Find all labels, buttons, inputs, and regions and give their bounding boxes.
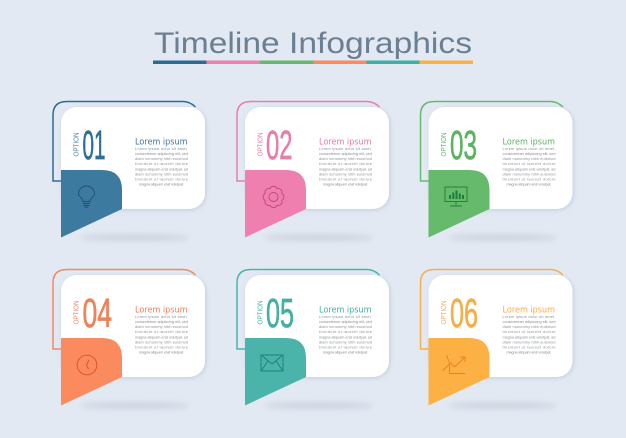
- body text: diam nonummy nibh euismod: [135, 172, 188, 176]
- heading: Lorem ipsum: [502, 138, 555, 148]
- body text: magna aliquam erat volutpat.: [506, 182, 552, 186]
- body text: consectetuer adipiscing elit, sed: [319, 320, 372, 324]
- label: option: OPTION: [74, 132, 80, 156]
- label: option: OPTION: [74, 300, 80, 324]
- body text: consectetuer adipiscing elit, sed: [319, 152, 372, 156]
- number: 05: [266, 290, 294, 336]
- heading: Lorem ipsum: [319, 138, 372, 148]
- body text: magna aliquam erat volutpat, ad: [502, 168, 556, 172]
- body text: tincidunt ut laoreet dolore: [319, 162, 372, 166]
- title: Timeline Infographics: [154, 27, 472, 60]
- body text: [319, 315, 372, 354]
- body text: consectetuer adipiscing elit, sed: [502, 320, 556, 324]
- body text: tincidunt ut laoreet dolore: [135, 346, 188, 350]
- number: 03: [450, 122, 477, 168]
- body text: diam nonummy nibh euismod: [135, 325, 188, 329]
- body text: Lorem ipsum dolor sit amet,: [502, 315, 556, 319]
- body text: Lorem ipsum dolor sit amet,: [135, 147, 188, 151]
- panel: option 04: [53, 270, 205, 409]
- number: 01: [82, 122, 106, 168]
- body text: magna aliquam erat volutpat, ad: [502, 336, 556, 340]
- panel: option 05: [237, 270, 389, 409]
- body text: magna aliquam erat volutpat, ad: [135, 336, 188, 340]
- icon: envelope: [261, 355, 283, 371]
- body text: magna aliquam erat volutpat, ad: [319, 336, 372, 340]
- number: 04: [82, 290, 112, 336]
- body text: tincidunt ut laoreet dolore: [135, 162, 188, 166]
- body text: consectetuer adipiscing elit, sed: [135, 320, 188, 324]
- body text: magna aliquam erat volutpat.: [506, 350, 552, 354]
- heading: Lorem ipsum: [135, 138, 188, 148]
- body text: diam nonummy nibh euismod: [502, 325, 556, 329]
- body text: magna aliquam erat volutpat.: [139, 182, 184, 186]
- body text: diam nonummy nibh euismod: [135, 157, 188, 161]
- body text: [319, 147, 372, 186]
- body text: diam nonummy nibh euismod: [319, 340, 372, 344]
- body text: diam nonummy nibh euismod: [319, 157, 372, 161]
- label: option: OPTION: [441, 132, 448, 156]
- heading: Lorem ipsum: [135, 306, 188, 316]
- icon: growth chart: [442, 355, 465, 374]
- body text: [502, 315, 556, 354]
- label: option: OPTION: [258, 132, 264, 156]
- body text: Lorem ipsum dolor sit amet,: [319, 147, 372, 151]
- heading: Lorem ipsum: [319, 306, 372, 316]
- panel: option 03: [420, 102, 572, 241]
- body text: magna aliquam erat volutpat.: [323, 350, 368, 354]
- body text: diam nonummy nibh euismod: [135, 340, 188, 344]
- icon: light bulb: [78, 186, 94, 207]
- label: option: OPTION: [441, 300, 448, 324]
- body text: tincidunt ut laoreet dolore: [502, 162, 556, 166]
- body text: diam nonummy nibh euismod: [319, 172, 372, 176]
- number: 06: [450, 290, 478, 336]
- body text: tincidunt ut laoreet dolore: [319, 346, 372, 350]
- body text: diam nonummy nibh euismod: [502, 340, 556, 344]
- panel: option 02: [237, 102, 389, 241]
- label: option: OPTION: [258, 300, 264, 324]
- body text: Lorem ipsum dolor sit amet,: [319, 315, 372, 319]
- body text: diam nonummy nibh euismod: [502, 172, 556, 176]
- body text: tincidunt ut laoreet dolore: [502, 330, 556, 334]
- icon: clock: [77, 355, 97, 375]
- icon: monitor chart: [445, 187, 467, 206]
- body text: diam nonummy nibh euismod: [502, 157, 556, 161]
- body text: magna aliquam erat volutpat, ad: [135, 168, 188, 172]
- body text: tincidunt ut laoreet dolore: [135, 178, 188, 182]
- body text: Lorem ipsum dolor sit amet,: [502, 147, 556, 151]
- body text: tincidunt ut laoreet dolore: [502, 346, 556, 350]
- panel: option 06: [420, 270, 572, 409]
- body text: magna aliquam erat volutpat, ad: [319, 168, 372, 172]
- body text: consectetuer adipiscing elit, sed: [502, 152, 556, 156]
- body text: [135, 147, 188, 186]
- body text: magna aliquam erat volutpat.: [139, 350, 184, 354]
- title underline: [153, 60, 473, 64]
- body text: [502, 147, 556, 186]
- body text: Lorem ipsum dolor sit amet,: [135, 315, 188, 319]
- body text: diam nonummy nibh euismod: [319, 325, 372, 329]
- number: 02: [266, 122, 292, 168]
- body text: tincidunt ut laoreet dolore: [319, 330, 372, 334]
- body text: [135, 315, 188, 354]
- body text: consectetuer adipiscing elit, sed: [135, 152, 188, 156]
- heading: Lorem ipsum: [502, 306, 555, 316]
- body text: tincidunt ut laoreet dolore: [319, 178, 372, 182]
- icon: gear: [263, 186, 284, 208]
- body text: tincidunt ut laoreet dolore: [502, 178, 556, 182]
- body text: tincidunt ut laoreet dolore: [135, 330, 188, 334]
- body text: magna aliquam erat volutpat.: [323, 182, 368, 186]
- panel: option 01: [53, 102, 205, 241]
